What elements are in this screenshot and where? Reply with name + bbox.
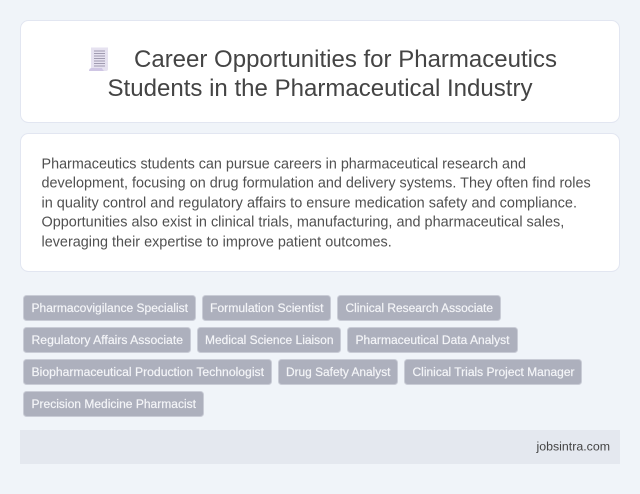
- summary text: in quality control and regulatory affairs to ensure medication safety and compliance.: [42, 195, 577, 211]
- tag: Drug Safety Analyst: Drug Safety Analyst: [286, 365, 391, 379]
- footer: [20, 430, 620, 464]
- footer source text: jobsintra.com: [536, 440, 610, 454]
- summary text: leveraging their expertise to improve patient outcomes.: [42, 234, 392, 250]
- panel: header: [20, 20, 620, 122]
- tag: Medical Science Liaison: [198, 328, 340, 352]
- title: Students in the Pharmaceutical Industry: [108, 75, 533, 102]
- tag: Biopharmaceutical Production Technologist: Biopharmaceutical Production Technologist: [32, 365, 265, 379]
- tag: Pharmaceutical Data Analyst: Pharmaceutical Data Analyst: [356, 333, 510, 347]
- tag: Regulatory Affairs Associate: Regulatory Affairs Associate: [32, 333, 183, 347]
- tag: Precision Medicine Pharmacist: [24, 392, 204, 416]
- panel: summary: [20, 134, 620, 272]
- title: [108, 46, 557, 102]
- summary text: Opportunities also exist in clinical trials, manufacturing, and pharmaceutical sales,: [42, 215, 564, 231]
- tag: Biopharmaceutical Production Technologist: [24, 360, 272, 384]
- tag: Precision Medicine Pharmacist: Precision Medicine Pharmacist: [32, 397, 197, 411]
- summary text: Pharmaceutics students can pursue careers in pharmaceutical research and: [42, 156, 526, 172]
- tag: Clinical Research Associate: [338, 296, 500, 320]
- title: Career Opportunities for Pharmaceutics: [134, 46, 557, 73]
- tag: Regulatory Affairs Associate: [24, 328, 190, 352]
- tag: Clinical Research Associate: Clinical Research Associate: [346, 301, 493, 315]
- tag: Formulation Scientist: Formulation Scientist: [210, 301, 324, 315]
- tag: Clinical Trials Project Manager: [404, 360, 582, 384]
- career tags: [24, 296, 582, 416]
- icon: document scroll: [89, 48, 108, 71]
- summary text: development, focusing on drug formulation and delivery systems. They often find roles: [42, 176, 591, 192]
- tag: Formulation Scientist: [202, 296, 330, 320]
- tag: Drug Safety Analyst: [278, 360, 398, 384]
- tag: Clinical Trials Project Manager: Clinical Trials Project Manager: [412, 365, 574, 379]
- tag: Medical Science Liaison: Medical Science Liaison: [205, 333, 334, 347]
- tag: Pharmacovigilance Specialist: Pharmacovigilance Specialist: [32, 301, 189, 315]
- tag: Pharmacovigilance Specialist: [24, 296, 196, 320]
- summary text: [42, 156, 591, 250]
- tag: Pharmaceutical Data Analyst: [348, 328, 518, 352]
